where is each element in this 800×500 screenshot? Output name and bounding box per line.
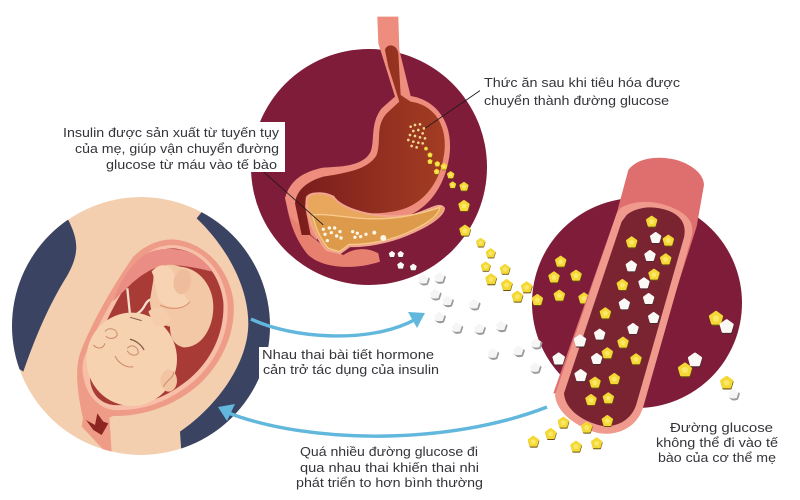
amniotic cavity	[90, 248, 223, 405]
callout: placental hormone	[259, 347, 440, 378]
callout: glucose cannot enter cells: Đường glucose	[670, 420, 773, 435]
callout: glucose cannot enter cells: không thể đi vào tế	[656, 435, 779, 450]
uterus	[77, 239, 234, 453]
callout: glucose cannot enter cells	[656, 420, 779, 465]
navy background right	[180, 212, 270, 448]
arrow: excess glucose to fetus	[218, 404, 547, 436]
callout: digested food: chuyển thành đường glucose	[484, 93, 669, 108]
placenta	[113, 249, 212, 302]
callout: placental hormone: cản trở tác dụng của insulin	[263, 362, 439, 377]
glucose particles in pancreas	[322, 226, 386, 242]
blood vessel	[553, 158, 704, 434]
callout: insulin: Insulin được sản xuất từ tuyến tụy	[63, 125, 280, 140]
callout: excess glucose: qua nhau thai khiến thai nhi	[300, 460, 479, 475]
glucose on tissue	[501, 257, 733, 376]
stomach organ	[285, 17, 450, 267]
panel: stomach and pancreas circle	[251, 17, 487, 285]
callout: digested food: Thức ăn sau khi tiêu hóa được	[484, 75, 681, 90]
callout: insulin: của mẹ, giúp vận chuyển đường	[75, 141, 279, 156]
callout: digested food	[484, 75, 681, 108]
callout: placental hormone: Nhau thai bài tiết hormone	[262, 347, 434, 362]
glucose stream from stomach	[389, 147, 511, 290]
glucose leaving vessel	[529, 377, 740, 452]
pancreas	[307, 193, 444, 253]
glucose particles in stomach	[407, 123, 426, 149]
callout: excess glucose	[296, 444, 483, 490]
arrow: placenta to hormone effect	[251, 312, 425, 336]
callout: excess glucose: Quá nhiều đường glucose đi	[300, 444, 478, 459]
callout: glucose cannot enter cells: bào của cơ thể mẹ	[658, 450, 776, 465]
fetus face	[93, 317, 174, 387]
callout: excess glucose: phát triển to hơn bình thường	[296, 475, 483, 490]
fetus	[86, 265, 213, 406]
umbilical cord	[126, 288, 150, 314]
navy background left	[12, 220, 76, 372]
panel: blood vessel circle	[501, 158, 742, 452]
white glucose particles between panels	[418, 272, 543, 374]
callout: insulin: glucose từ máu vào tế bào	[106, 157, 277, 172]
cervix	[86, 413, 108, 435]
callout: insulin	[60, 122, 285, 172]
glucose in vessel	[575, 217, 673, 433]
pointer lines	[263, 91, 480, 225]
panel: pregnant woman and fetus circle	[0, 197, 277, 457]
